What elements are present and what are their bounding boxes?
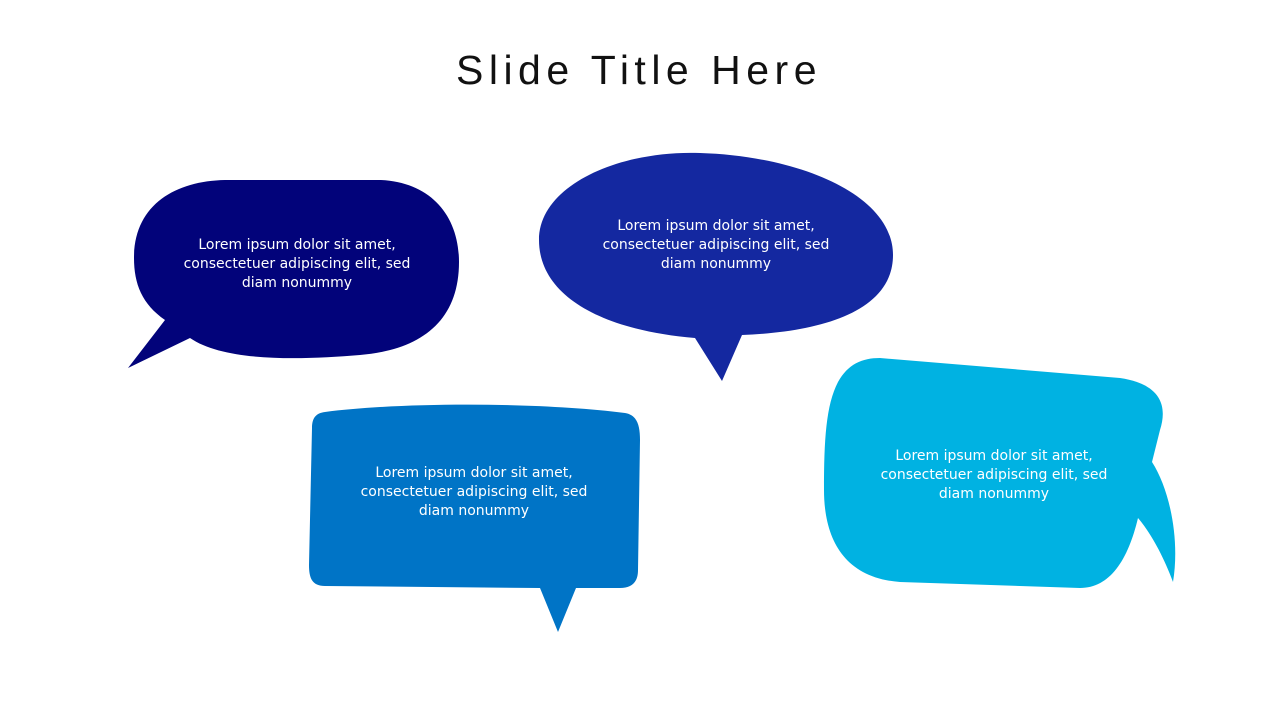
text: bubble 2: Lorem ipsum dolor sit amet, — [617, 218, 815, 234]
text: bubble 2: diam nonummy — [661, 256, 771, 272]
text: bubble 1: consectetuer adipiscing elit, sed — [184, 256, 410, 272]
text: bubble 3: Lorem ipsum dolor sit amet, — [375, 465, 573, 481]
bubble: medium blue bottom-center — [309, 405, 640, 632]
text: bubble 4: Lorem ipsum dolor sit amet, — [895, 448, 1093, 464]
bubble: cyan right — [824, 358, 1175, 588]
title: Slide Title Here — [456, 47, 822, 93]
text: bubble 4: diam nonummy — [939, 486, 1049, 502]
text: bubble 3: diam nonummy — [419, 503, 529, 519]
bubble: navy top-left — [128, 180, 459, 368]
text: bubble 4: consectetuer adipiscing elit, sed — [881, 467, 1107, 483]
text: bubble 2: consectetuer adipiscing elit, sed — [603, 237, 829, 253]
text: bubble 1: diam nonummy — [242, 275, 352, 291]
text: bubble 3: consectetuer adipiscing elit, sed — [361, 484, 587, 500]
bubble: royal blue top-center — [539, 153, 893, 381]
text: bubble 1: Lorem ipsum dolor sit amet, — [198, 237, 396, 253]
